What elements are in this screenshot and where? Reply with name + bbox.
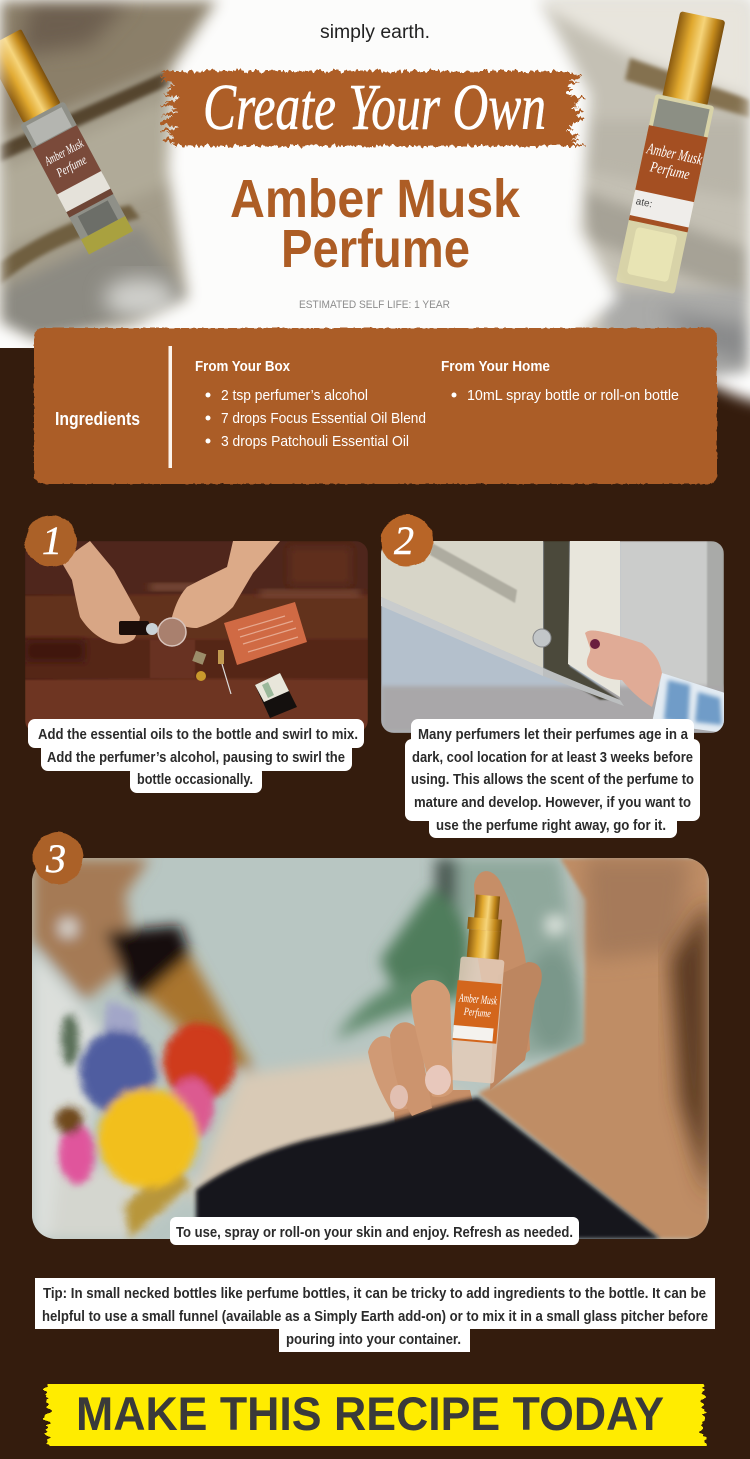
spray bottle: Amber Musk bbox=[458, 990, 498, 1008]
column: from your home: 10mL spray bottle or roll-on bottle bbox=[467, 388, 679, 404]
photo: linen and bottle, right bbox=[530, 0, 750, 390]
ingredients label: Ingredients bbox=[55, 409, 140, 429]
panel: ingredients bbox=[34, 328, 717, 484]
step 2 caption: dark, cool location for at least 3 weeks before bbox=[412, 750, 693, 766]
front fingers bbox=[368, 980, 453, 1116]
photo: linen and bottle, left bbox=[0, 0, 240, 350]
small parts: cap, sprayer bbox=[192, 650, 231, 694]
hand, right bbox=[172, 541, 280, 628]
tip callout: pouring into your container. bbox=[286, 1332, 461, 1348]
plaid sleeve bbox=[652, 673, 725, 733]
header panel bbox=[0, 0, 750, 405]
step 1 number badge bbox=[25, 515, 77, 567]
step 2 caption: Many perfumers let their perfumes age in a bbox=[418, 727, 689, 743]
step 3 number badge: 3 bbox=[45, 836, 66, 881]
hand on knob bbox=[585, 630, 662, 707]
step 1 caption: bottle occasionally. bbox=[137, 772, 253, 788]
icon: perfume bottle, left: Perfume bbox=[53, 152, 89, 180]
hand holding bottle bbox=[392, 871, 542, 1125]
cabinet door, left bbox=[381, 541, 624, 706]
icon: perfume bottle, left bbox=[0, 27, 133, 255]
title banner: Create Your Own: Create Your Own bbox=[203, 71, 546, 144]
call to action banner: MAKE THIS RECIPE TODAY bbox=[76, 1387, 664, 1440]
step 3 photo: spraying perfume bbox=[32, 858, 709, 1239]
icon: perfume bottle, right: ate: bbox=[635, 196, 653, 210]
step 2 caption: use the perfume right away, go for it. bbox=[436, 818, 666, 834]
step 2 caption: using. This allows the scent of the perfume to bbox=[411, 772, 694, 788]
blurred flowers bbox=[55, 1000, 235, 1239]
column: from your home bbox=[441, 359, 679, 404]
column: from your box: 7 drops Focus Essential Oil Blend bbox=[221, 411, 426, 427]
tip callout: Tip: In small necked bottles like perfume bottles, it can be tricky to add ingredients to the bottle. It can be bbox=[43, 1286, 706, 1302]
step 1 caption: Add the perfumer’s alcohol, pausing to swirl the bbox=[47, 750, 345, 766]
column: from your home: From Your Home bbox=[441, 359, 550, 375]
essential oil bottles bbox=[255, 673, 297, 718]
icon: perfume bottle, left: Amber Musk bbox=[41, 135, 86, 169]
step 2 number badge bbox=[381, 515, 433, 567]
step 2 number badge: 2 bbox=[394, 518, 414, 563]
logo: simply earth. bbox=[320, 22, 430, 43]
step 1 photo: hands on wooden table bbox=[25, 541, 368, 733]
recipe card bbox=[224, 602, 307, 665]
step 3 caption: To use, spray or roll-on your skin and enjoy. Refresh as needed. bbox=[176, 1225, 573, 1241]
cabinet door, right bbox=[568, 541, 620, 697]
tip callout bbox=[35, 1278, 715, 1352]
step 1 caption: Add the essential oils to the bottle and swirl to mix. bbox=[38, 727, 358, 743]
black garment bbox=[196, 1097, 660, 1239]
column: from your box: 3 drops Patchouli Essential Oil bbox=[221, 434, 409, 450]
step 2 caption bbox=[405, 719, 700, 838]
icon: perfume bottle, right: Perfume bbox=[648, 159, 691, 183]
step 1 caption bbox=[28, 719, 364, 793]
icon: perfume bottle, right: Amber Musk bbox=[645, 140, 704, 169]
heading: Amber Musk Perfume: Perfume bbox=[281, 219, 470, 279]
blurred background: woman in mirror and plant bbox=[32, 858, 590, 1239]
step 3 number badge bbox=[33, 832, 83, 884]
column: from your box: 2 tsp perfumer’s alcohol bbox=[221, 388, 368, 404]
shelf life note: ESTIMATED SELF LIFE: 1 YEAR bbox=[299, 299, 450, 311]
heading: Amber Musk Perfume bbox=[230, 169, 521, 279]
column: from your box: From Your Box bbox=[195, 359, 290, 375]
heading: Amber Musk Perfume: Amber Musk bbox=[230, 169, 521, 229]
step 1 number badge: 1 bbox=[42, 518, 62, 563]
step 2 caption: mature and develop. However, if you want to bbox=[414, 795, 691, 811]
hand, left bbox=[62, 541, 140, 644]
column: from your box bbox=[195, 359, 426, 450]
step 3 caption bbox=[170, 1217, 579, 1245]
icon: perfume bottle, right bbox=[616, 10, 732, 294]
step 2 photo: opening kitchen cabinet bbox=[381, 541, 725, 733]
bottle and glass pitcher bbox=[119, 618, 186, 646]
spray bottle bbox=[452, 894, 504, 1084]
spray bottle: Perfume bbox=[463, 1006, 491, 1020]
neck and shoulder bbox=[478, 858, 709, 1239]
